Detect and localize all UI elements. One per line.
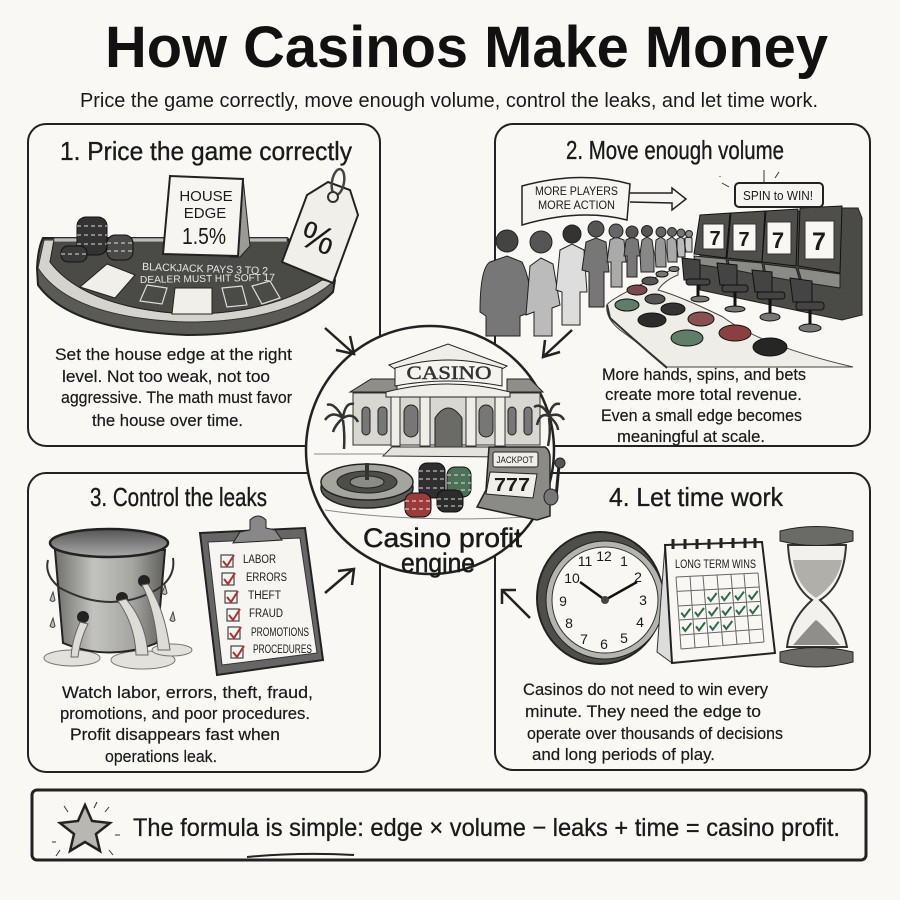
icon: chip stacks <box>61 217 133 262</box>
text: table rules: DEALER MUST HIT SOFT 17 <box>140 273 275 286</box>
sign: house edge: 1.5% <box>182 223 226 249</box>
center hub: casino profit engine <box>306 326 565 578</box>
clipboard: checklist: THEFT <box>248 590 281 602</box>
icon: jackpot slot <box>477 447 565 520</box>
arrow: toward slots <box>630 188 686 210</box>
icon: clock: 1 <box>620 553 628 569</box>
text: panel 4 body: operate over thousands of decisions <box>527 724 783 743</box>
sign: house edge: EDGE <box>184 205 226 222</box>
text: panel 1 body: aggressive. The math must favor <box>61 388 292 407</box>
heading: panel 4: 4. Let time work <box>609 482 784 512</box>
text: panel 1 body: Set the house edge at the right <box>55 345 292 364</box>
panel: control leaks <box>28 473 380 772</box>
text: panel 2 body: Even a small edge becomes <box>601 406 802 425</box>
text: slot sevens: 7 <box>812 228 826 256</box>
icon: clock: 7 <box>580 631 588 647</box>
arrows: panels to hub <box>325 328 572 618</box>
text: panel 4 body <box>523 680 783 764</box>
title: How Casinos Make Money <box>105 15 828 80</box>
icon: clock: 12 <box>596 548 612 564</box>
icon: leaking bucket <box>44 529 192 669</box>
icon: chips <box>405 463 471 517</box>
clipboard: checklist: ERRORS <box>246 572 287 584</box>
icon: clock: 2 <box>634 569 642 585</box>
illustration: queue of players <box>480 221 692 336</box>
text: panel 1 body: the house over time. <box>92 411 243 430</box>
panel: price the game <box>28 124 380 446</box>
illustration: betting boxes <box>140 281 280 307</box>
illustration: casino building: CASINO <box>406 363 492 384</box>
sign: spin to win <box>720 170 823 207</box>
text: panel 3 body: promotions, and poor procedures. <box>60 704 310 723</box>
text: table rules: BLACKJACK PAYS 3 TO 2 <box>142 261 268 277</box>
icon: calendar long term wins: LONG TERM WINS <box>675 557 756 571</box>
subtitle: Price the game correctly, move enough volume, control the leaks, and let time work. <box>80 90 818 112</box>
text: panel 1 body: level. Not too weak, not too <box>62 367 270 386</box>
illustration: casino building <box>314 344 548 519</box>
icon: calendar long term wins <box>657 538 775 663</box>
icon: hourglass <box>780 526 853 667</box>
callout: more players banner: MORE ACTION <box>538 198 615 212</box>
illustration: cards <box>80 264 212 314</box>
icon: clock: 4 <box>636 614 644 630</box>
icon: jackpot slot: JACKPOT <box>496 455 534 466</box>
icon: clock <box>537 532 664 664</box>
panel: move volume <box>480 124 870 446</box>
text: panel 3 body: Watch labor, errors, theft, fraud, <box>62 683 313 702</box>
text: slot sevens: 7 <box>738 229 750 251</box>
label: hub <box>363 523 523 578</box>
text: table rules <box>140 261 275 286</box>
panel: let time work <box>495 473 870 770</box>
icon: palm trees <box>325 404 564 449</box>
text: panel 2 body: meaningful at scale. <box>617 427 765 446</box>
illustration: blackjack table <box>37 168 358 335</box>
text: panel 2 body: create more total revenue. <box>605 385 802 404</box>
text: panel 3 body: operations leak. <box>105 747 217 766</box>
clipboard: checklist: PROMOTIONS <box>251 627 309 639</box>
callout: more players banner <box>522 177 630 225</box>
icon: star <box>52 802 120 856</box>
label: hub: Casino profit <box>363 523 523 553</box>
icon: clock: 3 <box>639 592 647 608</box>
text: slot sevens: 7 <box>709 228 721 250</box>
text: panel 4 body: Casinos do not need to win every <box>523 680 768 699</box>
icon: jackpot slot: 777 <box>494 475 530 495</box>
banner: formula <box>32 790 866 860</box>
sign: spin to win: SPIN to WIN! <box>743 188 813 203</box>
text: panel 4 body: minute. They need the edge to <box>525 702 761 721</box>
label: hub: engine <box>401 548 475 578</box>
text: slot sevens <box>709 228 826 256</box>
illustration: chip path <box>607 266 853 368</box>
icon: roulette wheel <box>321 463 413 508</box>
heading: panel 2: 2. Move enough volume <box>566 135 784 165</box>
sign: house edge: HOUSE <box>179 188 233 205</box>
clipboard: checklist: FRAUD <box>249 608 283 620</box>
text: panel 4 body: and long periods of play. <box>532 745 715 764</box>
heading: panel 3: 3. Control the leaks <box>90 482 267 512</box>
clipboard: checklist: PROCEDURES <box>253 644 312 656</box>
icon: percent price tag: % <box>295 213 341 264</box>
heading: panel 1: 1. Price the game correctly <box>60 136 352 166</box>
icon: clock: 6 <box>600 636 608 652</box>
text: slot sevens: 7 <box>772 228 784 253</box>
icon: clock: 9 <box>559 593 567 609</box>
clipboard: checklist <box>200 516 323 675</box>
text: panel 3 body: Profit disappears fast when <box>70 725 280 744</box>
callout: more players banner: MORE PLAYERS <box>535 184 618 198</box>
text: panel 3 body <box>60 683 313 766</box>
icon: clock: 10 <box>564 570 580 586</box>
illustration: stools <box>682 258 824 332</box>
sign: house edge <box>163 176 250 257</box>
text: panel 2 body: More hands, spins, and bets <box>602 365 806 384</box>
illustration: slot machines <box>682 170 862 332</box>
icon: clock: 5 <box>620 630 628 646</box>
text: panel 2 body <box>601 365 806 446</box>
icon: clock: 11 <box>578 553 592 569</box>
text: panel 1 body <box>55 345 292 430</box>
icon: percent price tag <box>282 168 358 283</box>
icon: clock: 8 <box>565 615 573 631</box>
text: formula: The formula is simple: edge × volume − leaks + time = casino profit. <box>133 814 840 842</box>
clipboard: checklist: LABOR <box>243 554 276 566</box>
